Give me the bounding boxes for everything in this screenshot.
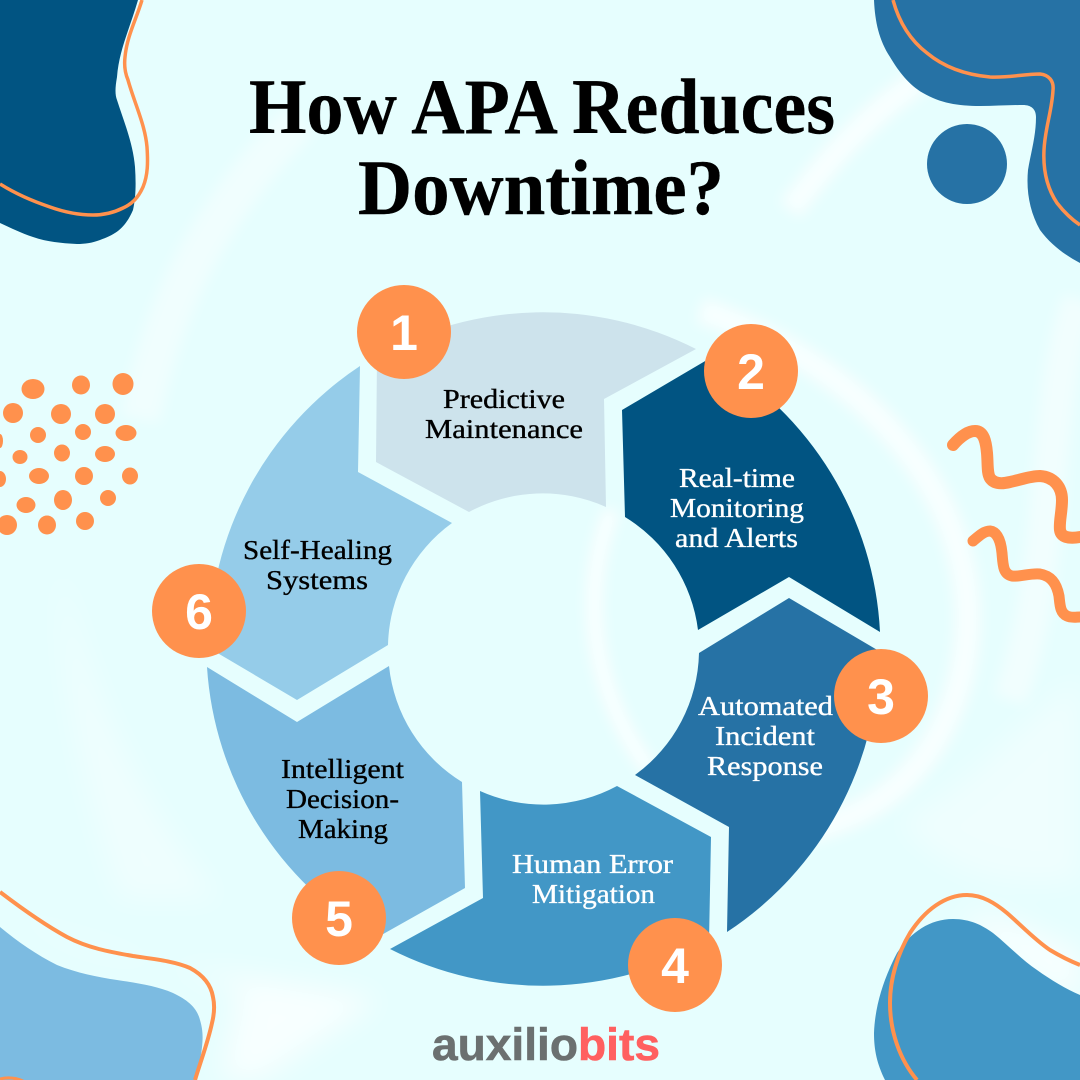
blob: top-right blue xyxy=(874,0,1080,263)
blob: top-left dark blue xyxy=(0,0,148,244)
badge 6 xyxy=(152,564,246,658)
cycle diagram xyxy=(152,285,928,1012)
segment 4: human error mitigation xyxy=(390,786,711,986)
accent line: bottom-left orange outline xyxy=(0,892,214,1080)
segment 6: self-healing systems xyxy=(209,366,452,700)
label: self-healing systems xyxy=(243,535,392,595)
blob: bottom-right blue xyxy=(874,895,1080,1080)
label: real-time monitoring and alerts: Real-time xyxy=(679,463,795,493)
label: predictive maintenance xyxy=(425,384,583,444)
squiggles: orange xyxy=(953,431,1080,617)
label: intelligent decision-making: Decision- xyxy=(286,784,399,814)
title: How APA Reduces xyxy=(249,63,835,150)
segment 5: intelligent decision-making xyxy=(207,666,465,938)
accent line: top-right orange outline xyxy=(893,0,1080,225)
title: Downtime? xyxy=(358,144,724,231)
label: automated incident response xyxy=(698,691,834,781)
logo: auxiliobits: auxiliobits xyxy=(432,1019,660,1070)
badge 4: 4 xyxy=(661,938,689,994)
label: intelligent decision-making xyxy=(281,754,405,844)
label: self-healing systems: Systems xyxy=(266,565,368,595)
label: real-time monitoring and alerts: Monitoring xyxy=(670,493,804,523)
label: intelligent decision-making: Making xyxy=(298,814,388,844)
badge 3 xyxy=(834,649,928,743)
badge 1: 1 xyxy=(390,305,418,361)
label: real-time monitoring and alerts: and Alerts xyxy=(675,523,798,553)
label: real-time monitoring and alerts xyxy=(670,463,804,553)
decorative circle: top-right xyxy=(927,124,1007,204)
title xyxy=(249,63,835,231)
badge 5 xyxy=(292,871,386,965)
label: human error mitigation: Human Error xyxy=(512,849,673,879)
label: intelligent decision-making: Intelligent xyxy=(281,754,405,784)
dots pattern: orange xyxy=(0,373,138,535)
label: automated incident response: Response xyxy=(707,751,823,781)
label: human error mitigation: Mitigation xyxy=(532,879,656,909)
badge 2: 2 xyxy=(737,344,765,400)
accent: bottom-left corner orange line xyxy=(0,1078,23,1080)
badge 3: 3 xyxy=(867,669,895,725)
accent line: bottom-right orange outline xyxy=(890,895,1080,1080)
badge 5: 5 xyxy=(325,891,353,947)
segment 3: automated incident response xyxy=(635,598,879,932)
badge 1 xyxy=(357,285,451,379)
label: automated incident response: Incident xyxy=(715,721,816,751)
blob: bottom-left light blue xyxy=(0,892,214,1080)
badge 4 xyxy=(628,918,722,1012)
label: automated incident response: Automated xyxy=(698,691,834,721)
label: predictive maintenance: Maintenance xyxy=(425,414,583,444)
badge 2 xyxy=(704,324,798,418)
segment 2: real-time monitoring xyxy=(622,357,880,632)
label: predictive maintenance: Predictive xyxy=(443,384,565,414)
label: self-healing systems: Self-Healing xyxy=(243,535,392,565)
label: human error mitigation xyxy=(512,849,673,909)
accent line: top-left orange outline xyxy=(0,0,148,215)
segment 1: predictive maintenance xyxy=(376,312,696,512)
badge 6: 6 xyxy=(185,584,213,640)
